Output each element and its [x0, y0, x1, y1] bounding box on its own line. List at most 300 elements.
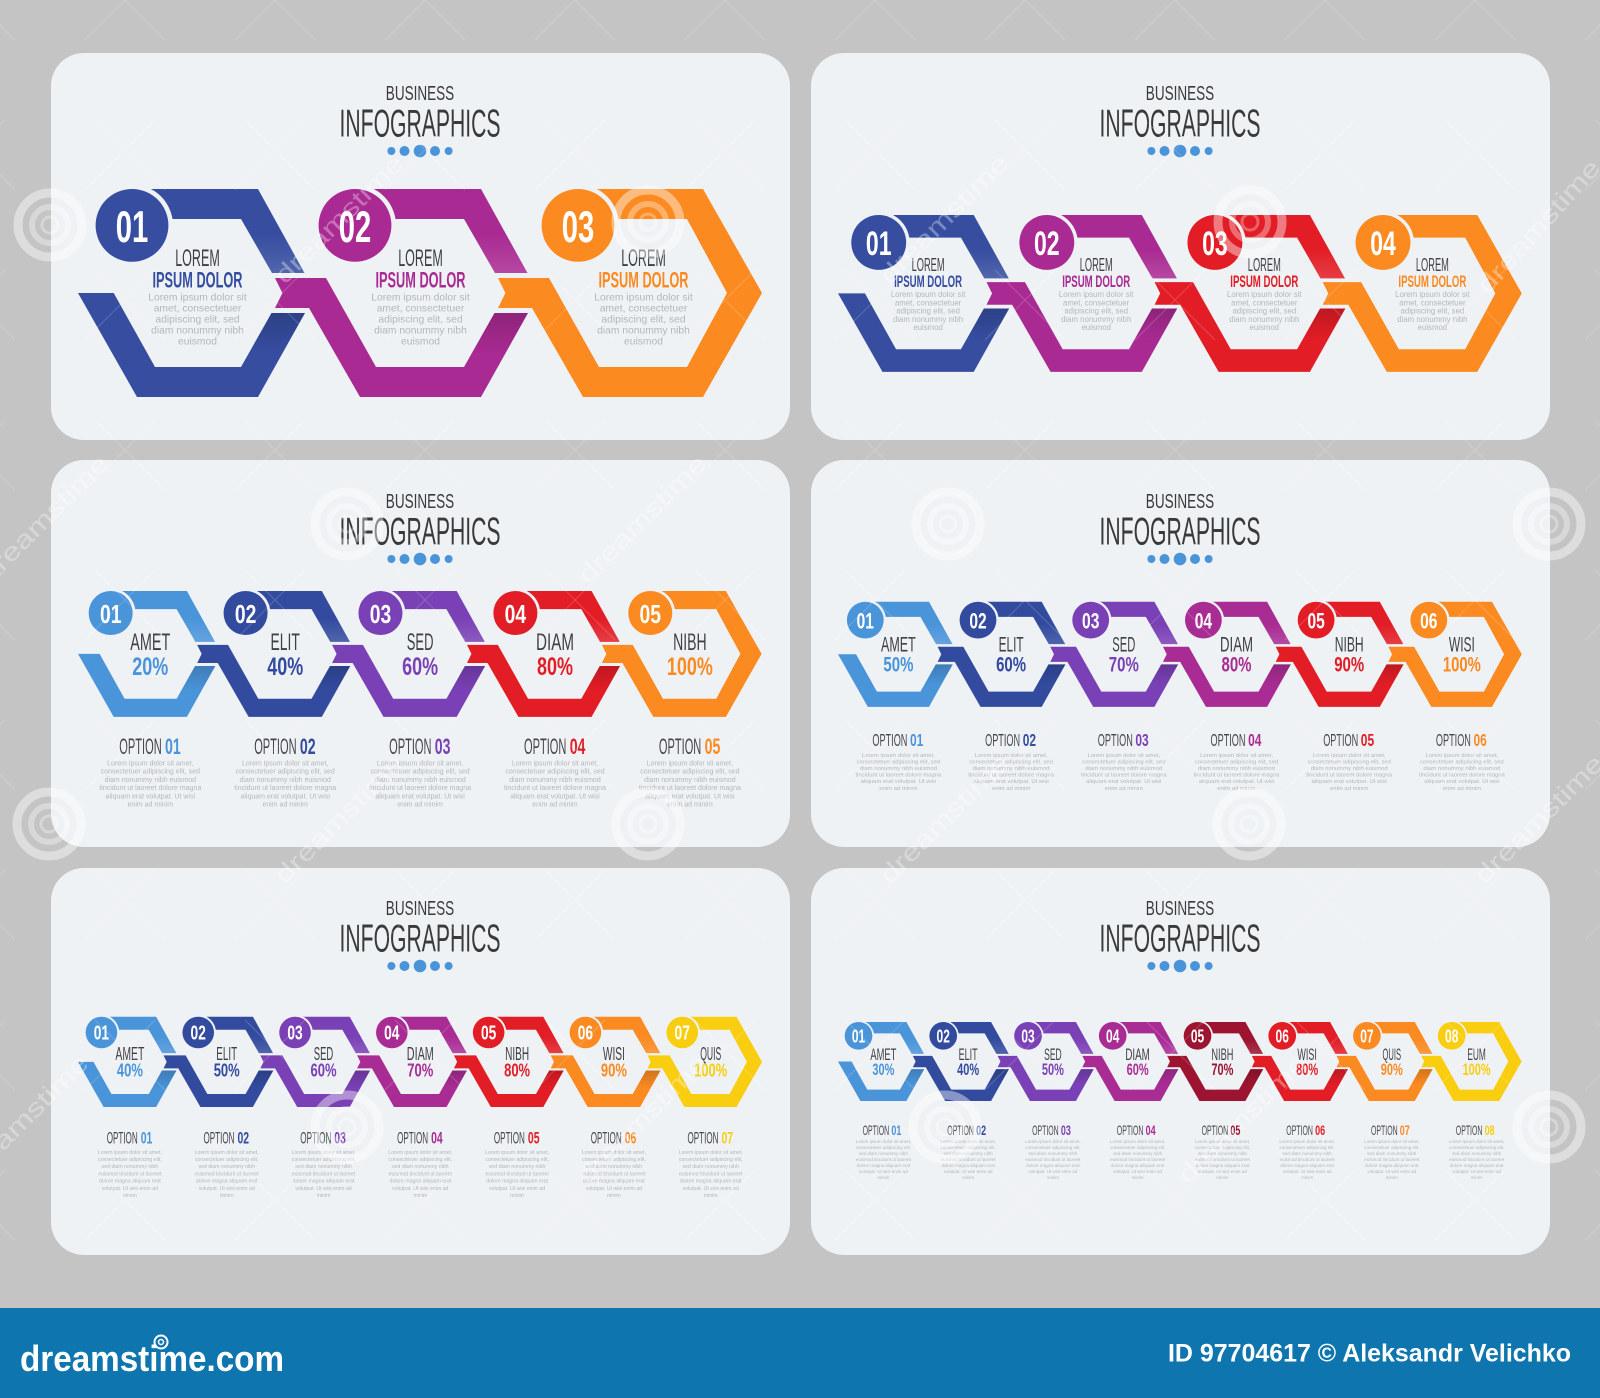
- step 05: NIBH: [673, 630, 707, 656]
- step 01: amet, consectetuer: [154, 303, 242, 314]
- step 01: sed diam nonummy nibh: [859, 1151, 908, 1156]
- title block: INFOGRAPHICS: [340, 511, 500, 554]
- step 05: consectetuer adipiscing elit, sed: [1307, 760, 1391, 766]
- step 05: NIBH: [1335, 634, 1364, 657]
- step 02: [938, 599, 1065, 792]
- step 04: DIAM: [1125, 1046, 1150, 1064]
- step 02: LOREM: [398, 246, 443, 272]
- step 02: 02: [1023, 730, 1036, 750]
- watermark overlay: dreamstime: [572, 1049, 712, 1189]
- step 02: 50%: [214, 1060, 240, 1081]
- step 01: dolore magna aliquam erat: [857, 1163, 911, 1168]
- step 02: 02: [235, 599, 256, 629]
- step 01: adipiscing elit, sed: [896, 307, 960, 316]
- step 01: OPTION: [107, 1129, 138, 1148]
- step 01: euismod: [913, 323, 943, 332]
- step 06: sed diam nonummy nibh: [1283, 1151, 1332, 1156]
- step 02: volutpat. Ut wisi enim ad: [944, 1169, 993, 1174]
- step 01: Lorem ipsum dolor sit amet,: [98, 1150, 162, 1156]
- step 01: [78, 588, 215, 808]
- step 04: DIAM: [1220, 634, 1253, 657]
- step 06: sed diam nonummy nibh: [586, 1164, 642, 1170]
- step 01: enim ad minim: [128, 802, 173, 808]
- step 05: Lorem ipsum dolor sit amet,: [485, 1150, 549, 1156]
- watermark overlay: dreamstime: [1172, 1049, 1312, 1189]
- step 05: [602, 588, 762, 808]
- step 04: aliquam erat volutpat. Ut wisi: [1199, 779, 1274, 785]
- step 02: diam nonummy nibh: [1061, 315, 1131, 324]
- step 01: Lorem ipsum dolor sit amet,: [856, 1139, 911, 1144]
- step 02: Lorem ipsum dolor sit: [1059, 290, 1134, 299]
- step 04: enim ad minim: [1217, 786, 1256, 792]
- step 06: aliquam erat volutpat. Ut wisi: [1424, 779, 1500, 785]
- step 06: Lorem ipsum dolor sit amet,: [1426, 753, 1499, 759]
- step 01: 01: [141, 1129, 152, 1148]
- step 02: minim: [962, 1175, 974, 1180]
- step 03: OPTION: [389, 734, 432, 759]
- step 02: [197, 588, 350, 808]
- step 01: 20%: [132, 653, 168, 681]
- step 05: 05: [640, 599, 661, 629]
- step 06: euismod tincidunt ut laoreet: [1280, 1157, 1335, 1162]
- step 01: 01: [891, 1122, 902, 1138]
- step 01: IPSUM DOLOR: [894, 272, 962, 291]
- step 06: 06: [1420, 608, 1437, 633]
- step 02: 40%: [957, 1061, 979, 1079]
- step 03: euismod: [1250, 323, 1279, 332]
- step 03: tincidunt ut laoreet dolore magna: [369, 785, 471, 792]
- step 02: dolore magna aliquam erat: [196, 1179, 258, 1185]
- step 06: 06: [1276, 1026, 1289, 1046]
- step 03: [1155, 212, 1345, 372]
- step 07: sed diam nonummy nibh: [1367, 1151, 1417, 1156]
- step 04: IPSUM DOLOR: [1398, 272, 1466, 291]
- step 05: dolore magna aliquam erat: [1196, 1163, 1250, 1168]
- step 08: volutpat. Ut wisi enim ad: [1452, 1169, 1501, 1174]
- step 04: Lorem ipsum dolor sit: [1395, 290, 1470, 299]
- step 03: 03: [1135, 730, 1149, 750]
- step 05: sed diam nonummy nibh: [489, 1164, 545, 1170]
- watermark overlay: dreamstime: [1469, 749, 1600, 889]
- step 03: Lorem ipsum dolor sit: [1227, 290, 1302, 299]
- step 01: 40%: [117, 1060, 143, 1081]
- step 04: 04: [505, 599, 527, 629]
- step 03: SED: [407, 630, 433, 656]
- step 04: [357, 1015, 467, 1199]
- title block: BUSINESS: [386, 898, 454, 920]
- title block: [340, 491, 500, 565]
- panel: seven-step infographic: [51, 868, 790, 1255]
- step 04: 04: [431, 1129, 443, 1148]
- step 01: minim: [123, 1193, 137, 1199]
- step 05: Lorem ipsum dolor sit amet,: [1313, 753, 1386, 759]
- step 05: OPTION: [1323, 730, 1358, 750]
- step 05: 05: [1361, 730, 1374, 750]
- step 03: dolore magna aliquam erat: [293, 1179, 355, 1185]
- step 05: [1167, 1020, 1263, 1180]
- step 04: 60%: [1127, 1061, 1149, 1079]
- step 07: euismod tincidunt ut laoreet: [1364, 1157, 1420, 1162]
- step 05: sed diam nonummy nibh: [1198, 1151, 1247, 1156]
- step 03: diam nonummy nibh euismod: [1085, 766, 1162, 772]
- step 03: adipiscing elit, sed: [1232, 307, 1296, 316]
- step 02: aliquam erat volutpat. Ut wisi: [973, 779, 1049, 785]
- step 03: sed diam nonummy nibh: [1028, 1151, 1078, 1156]
- step 01: [78, 1015, 177, 1199]
- step 04: diam nonummy nibh euismod: [1198, 766, 1275, 772]
- step 04: 04: [384, 1022, 400, 1044]
- step 03: diam nonummy nibh euismod: [374, 777, 466, 784]
- step 01: Lorem ipsum dolor sit: [891, 290, 966, 299]
- step 01: diam nonummy nibh: [893, 315, 963, 324]
- step 04: consectetuer adipiscing elit,: [388, 1157, 452, 1163]
- step 08: dolore magna aliquam erat: [1450, 1163, 1504, 1168]
- step 01: 01: [94, 1022, 109, 1044]
- step 05: 05: [528, 1129, 540, 1148]
- step 01: euismod tincidunt ut laoreet: [98, 1171, 162, 1177]
- step 01: diam nonummy nibh: [151, 325, 244, 336]
- step 04: sed diam nonummy nibh: [392, 1164, 449, 1170]
- title block: [1100, 83, 1260, 157]
- step 03: adipiscing elit, sed: [601, 314, 686, 325]
- step 01: 01: [165, 734, 181, 759]
- step 02: [913, 1020, 1009, 1180]
- title block: BUSINESS: [1146, 83, 1214, 105]
- step 05: 80%: [504, 1060, 530, 1081]
- step 05: volutpat. Ut wisi enim ad: [489, 1186, 545, 1192]
- title block: [340, 898, 500, 972]
- step 05: OPTION: [659, 734, 701, 759]
- step 04: tincidunt ut laoreet dolore magna: [1194, 773, 1280, 779]
- step 03: amet, consectetuer: [600, 303, 688, 314]
- step 02: 02: [238, 1129, 249, 1148]
- step 03: Lorem ipsum dolor sit amet,: [377, 760, 463, 768]
- step 01: enim ad minim: [879, 786, 918, 792]
- step 04: OPTION: [397, 1129, 428, 1148]
- step 08: [1421, 1020, 1522, 1180]
- step 04: OPTION: [524, 734, 566, 759]
- step 03: SED: [314, 1043, 333, 1064]
- step 03: IPSUM DOLOR: [598, 267, 689, 292]
- step 02: 40%: [267, 653, 303, 681]
- step 02: tincidunt ut laoreet dolore magna: [968, 773, 1055, 779]
- step 05: 05: [481, 1022, 496, 1044]
- step 02: Lorem ipsum dolor sit amet,: [940, 1139, 996, 1144]
- step 04: [1163, 599, 1291, 792]
- title block: INFOGRAPHICS: [1100, 103, 1260, 146]
- step 01: tincidunt ut laoreet dolore magna: [856, 773, 942, 779]
- step 01: [838, 599, 953, 792]
- step 04: Lorem ipsum dolor sit amet,: [388, 1150, 452, 1156]
- step 04: Lorem ipsum dolor sit amet,: [1200, 753, 1273, 759]
- step 05: aliquam erat volutpat. Ut wisi: [1312, 779, 1387, 785]
- step 04: consectetuer adipiscing elit, sed: [1195, 760, 1278, 766]
- step 03: sed diam nonummy nibh: [295, 1164, 352, 1170]
- step 02: 02: [969, 608, 987, 633]
- step 02: amet, consectetuer: [1063, 298, 1130, 307]
- step 01: aliquam erat volutpat. Ut wisi: [106, 793, 195, 800]
- step 07: 100%: [694, 1060, 728, 1081]
- step 07: QUIS: [700, 1043, 721, 1064]
- step 01: IPSUM DOLOR: [152, 267, 243, 292]
- step 04: Lorem ipsum dolor sit amet,: [1110, 1139, 1165, 1144]
- step 01: tincidunt ut laoreet dolore magna: [99, 785, 201, 792]
- step 05: diam nonummy nibh euismod: [644, 777, 736, 784]
- title block: INFOGRAPHICS: [340, 103, 500, 146]
- step 04: 04: [1195, 608, 1212, 633]
- step 06: consectetuer adipiscing elit, sed: [1420, 760, 1504, 766]
- step 01: 01: [852, 1026, 865, 1046]
- step 02: consectetuer adipiscing elit,: [195, 1157, 259, 1163]
- step 01: OPTION: [119, 734, 162, 759]
- step 01: 01: [857, 608, 874, 633]
- step 05: consectetuer adipiscing elit, sed: [640, 769, 740, 776]
- panel: six-step infographic: [811, 460, 1550, 847]
- step 04: amet, consectetuer: [1399, 298, 1466, 307]
- step 03: dolore magna aliquam erat: [1026, 1163, 1080, 1168]
- step 03: amet, consectetuer: [1231, 298, 1298, 307]
- step 06: volutpat. Ut wisi enim ad: [586, 1186, 642, 1192]
- step 05: enim ad minim: [667, 802, 713, 808]
- step 07: minim: [704, 1193, 718, 1199]
- step 06: 100%: [1443, 654, 1481, 677]
- step 06: consectetuer adipiscing elit,: [582, 1157, 646, 1163]
- step 08: Lorem ipsum dolor sit amet,: [1449, 1139, 1504, 1144]
- step 04: enim ad minim: [532, 802, 578, 808]
- step 03: volutpat. Ut wisi enim ad: [1029, 1169, 1078, 1174]
- step 03: diam nonummy nibh: [597, 325, 690, 336]
- step 07: [648, 1015, 762, 1199]
- step 02: IPSUM DOLOR: [1062, 272, 1130, 291]
- step 02: 02: [1034, 225, 1060, 263]
- step 07: 07: [675, 1022, 690, 1044]
- step 05: 90%: [1334, 654, 1364, 677]
- step 04: diam nonummy nibh euismod: [509, 777, 601, 784]
- step 05: tincidunt ut laoreet dolore magna: [1306, 773, 1393, 779]
- step 01: adipiscing elit, sed: [155, 314, 240, 325]
- step 03: Lorem ipsum dolor sit amet,: [1025, 1139, 1081, 1144]
- step 05: 05: [1191, 1026, 1204, 1046]
- step 01: diam nonummy nibh euismod: [105, 777, 196, 784]
- step 03: LOREM: [621, 246, 666, 272]
- step 07: 07: [1360, 1026, 1374, 1046]
- step 03: consectetuer adipiscing elit, sed: [370, 769, 470, 776]
- step 04: DIAM: [536, 630, 574, 656]
- step 02: minim: [220, 1193, 234, 1199]
- step 01: 01: [116, 203, 148, 252]
- step 01: LOREM: [175, 246, 220, 272]
- step 01: [78, 184, 305, 397]
- watermark overlay: dreamstime: [572, 449, 712, 589]
- step 02: consectetuer adipiscing elit,: [940, 1145, 996, 1150]
- step 03: 03: [1061, 1122, 1071, 1138]
- step 05: euismod tincidunt ut laoreet: [485, 1171, 549, 1177]
- step 03: [998, 1020, 1094, 1180]
- panel: four-step infographic: [811, 53, 1550, 440]
- step 03: [332, 588, 485, 808]
- step 04: 04: [570, 734, 586, 759]
- step 03: 03: [435, 734, 450, 759]
- step 02: OPTION: [254, 734, 297, 759]
- step 03: diam nonummy nibh: [1229, 315, 1299, 324]
- step 03: aliquam erat volutpat. Ut wisi: [375, 793, 465, 800]
- step 01: AMET: [881, 634, 916, 657]
- step 02: diam nonummy nibh: [374, 325, 467, 336]
- step 07: volutpat. Ut wisi enim ad: [683, 1186, 739, 1192]
- title block: [1100, 898, 1260, 972]
- step 02: 02: [937, 1026, 950, 1046]
- panel: eight-step infographic: [811, 868, 1550, 1255]
- step 06: OPTION: [1286, 1122, 1313, 1138]
- title block: BUSINESS: [1146, 491, 1214, 513]
- step 01: consectetuer adipiscing elit, sed: [857, 760, 940, 766]
- step 02: dolore magna aliquam erat: [941, 1163, 996, 1168]
- step 08: sed diam nonummy nibh: [1452, 1151, 1502, 1156]
- step 08: consectetuer adipiscing elit,: [1449, 1145, 1504, 1150]
- step 04: adipiscing elit, sed: [1401, 307, 1464, 316]
- step 02: 02: [191, 1022, 206, 1044]
- step 04: 80%: [537, 653, 573, 681]
- step 03: consectetuer adipiscing elit,: [292, 1157, 355, 1163]
- step 03: SED: [1112, 634, 1135, 657]
- step 02: enim ad minim: [262, 802, 308, 808]
- step 06: WISI: [1297, 1046, 1317, 1064]
- step 02: Lorem ipsum dolor sit: [371, 292, 470, 303]
- step 02: LOREM: [1080, 255, 1113, 275]
- step 03: minim: [317, 1193, 330, 1199]
- step 04: euismod: [1418, 323, 1447, 332]
- step 03: euismod tincidunt ut laoreet: [1025, 1157, 1081, 1162]
- title block: INFOGRAPHICS: [340, 918, 500, 961]
- step 06: WISI: [1449, 634, 1475, 657]
- step 08: minim: [1471, 1175, 1483, 1180]
- step 03: 60%: [402, 653, 438, 681]
- step 03: 03: [1082, 608, 1099, 633]
- step 03: IPSUM DOLOR: [1230, 272, 1298, 291]
- step 02: tincidunt ut laoreet dolore magna: [234, 785, 336, 792]
- step 05: dolore magna aliquam erat: [486, 1179, 549, 1185]
- step 01: consectetuer adipiscing elit, sed: [101, 769, 200, 776]
- step 05: OPTION: [494, 1129, 525, 1148]
- step 03: OPTION: [1032, 1122, 1059, 1138]
- step 04: DIAM: [407, 1043, 434, 1064]
- step 01: Lorem ipsum dolor sit amet,: [862, 753, 935, 759]
- step 03: enim ad minim: [1105, 786, 1143, 792]
- step 06: Lorem ipsum dolor sit amet,: [582, 1150, 646, 1156]
- step 05: NIBH: [1211, 1046, 1233, 1064]
- step 05: 100%: [667, 653, 713, 681]
- step 03: volutpat. Ut wisi enim ad: [295, 1186, 352, 1192]
- footer credit: ID 97704617 © Aleksandr Velichko: [1168, 1340, 1571, 1368]
- step 01: [838, 212, 1009, 372]
- step 08: OPTION: [1456, 1122, 1482, 1138]
- step 05: OPTION: [1202, 1122, 1228, 1138]
- step 06: minim: [1301, 1175, 1313, 1180]
- step 06: [551, 1015, 661, 1199]
- step 07: 07: [722, 1129, 733, 1148]
- step 05: 05: [1307, 608, 1325, 633]
- step 03: 03: [370, 599, 391, 629]
- step 03: 70%: [1109, 654, 1139, 677]
- step 05: [454, 1015, 564, 1199]
- step 04: OPTION: [1210, 730, 1246, 750]
- step 03: Lorem ipsum dolor sit: [594, 292, 693, 303]
- step 03: [1050, 599, 1178, 792]
- step 01: volutpat. Ut wisi enim ad: [102, 1186, 158, 1192]
- step 04: consectetuer adipiscing elit, sed: [505, 769, 605, 776]
- step 01: minim: [877, 1175, 890, 1180]
- step 02: amet, consectetuer: [377, 303, 465, 314]
- step 06: enim ad minim: [1443, 786, 1481, 792]
- step 04: volutpat. Ut wisi enim ad: [392, 1186, 449, 1192]
- step 07: dolore magna aliquam erat: [680, 1179, 742, 1185]
- step 03: 03: [287, 1022, 303, 1044]
- title block: INFOGRAPHICS: [1100, 511, 1260, 554]
- step 01: OPTION: [863, 1122, 889, 1138]
- step 01: LOREM: [912, 255, 945, 275]
- step 01: 01: [866, 225, 892, 263]
- step 02: [275, 184, 528, 397]
- step 01: volutpat. Ut wisi enim ad: [859, 1169, 908, 1174]
- step 07: consectetuer adipiscing elit,: [1364, 1145, 1419, 1150]
- step 03: tincidunt ut laoreet dolore magna: [1081, 773, 1167, 779]
- step 01: AMET: [870, 1046, 896, 1064]
- step 05: consectetuer adipiscing elit,: [485, 1157, 549, 1163]
- step 06: OPTION: [1436, 730, 1471, 750]
- step 05: NIBH: [505, 1043, 529, 1064]
- step 05: volutpat. Ut wisi enim ad: [1198, 1169, 1247, 1174]
- step 02: adipiscing elit, sed: [378, 314, 463, 325]
- step 01: consectetuer adipiscing elit,: [98, 1157, 162, 1163]
- panel: five-step infographic: [51, 460, 790, 847]
- step 01: 01: [910, 730, 923, 750]
- step 02: 60%: [996, 654, 1026, 677]
- step 03: OPTION: [300, 1129, 331, 1148]
- step 02: sed diam nonummy nibh: [198, 1164, 255, 1170]
- step 07: OPTION: [1371, 1122, 1398, 1138]
- step 04: [1323, 212, 1522, 372]
- step 04: OPTION: [1117, 1122, 1143, 1138]
- step 05: tincidunt ut laoreet dolore magna: [639, 785, 741, 792]
- step 02: Lorem ipsum dolor sit amet,: [242, 760, 328, 768]
- title block: BUSINESS: [386, 491, 454, 513]
- step 06: 06: [625, 1129, 636, 1148]
- step 02: aliquam erat volutpat. Ut wisi: [240, 793, 330, 800]
- step 07: volutpat. Ut wisi enim ad: [1367, 1169, 1417, 1174]
- step 04: 04: [1370, 225, 1396, 263]
- step 08: EUM: [1467, 1046, 1486, 1064]
- step 07: dolore magna aliquam erat: [1365, 1163, 1419, 1168]
- step 03: [260, 1015, 370, 1199]
- step 02: [164, 1015, 273, 1199]
- step 04: [467, 588, 620, 808]
- step 01: sed diam nonummy nibh: [102, 1164, 158, 1170]
- step 02: Lorem ipsum dolor sit amet,: [975, 753, 1048, 759]
- step 03: Lorem ipsum dolor sit amet,: [1087, 753, 1160, 759]
- watermark overlay: dreamstime: [874, 149, 1014, 289]
- step 08: 08: [1485, 1122, 1495, 1138]
- step 03: 03: [1021, 1026, 1035, 1046]
- step 02: OPTION: [204, 1129, 234, 1148]
- step 03: SED: [1044, 1046, 1062, 1064]
- step 01: 50%: [883, 654, 914, 677]
- step 02: Lorem ipsum dolor sit amet,: [195, 1150, 259, 1156]
- step 01: AMET: [115, 1043, 144, 1064]
- step 05: [1276, 599, 1404, 792]
- step 04: minim: [1132, 1175, 1144, 1180]
- title block: [340, 83, 500, 157]
- watermark overlay: dreamstime: [1472, 154, 1600, 299]
